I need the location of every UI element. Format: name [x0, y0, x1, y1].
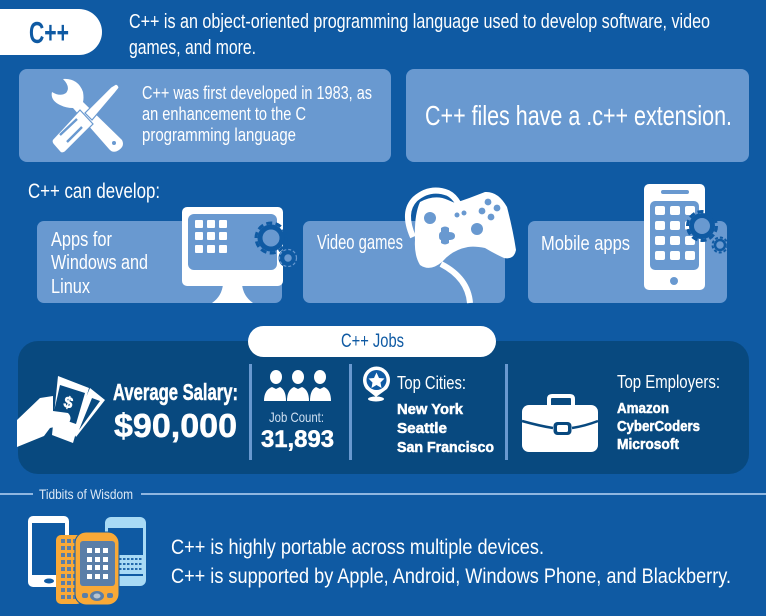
panel text: Linux — [51, 276, 90, 298]
icon: people — [264, 370, 331, 401]
panel: video games — [303, 191, 516, 303]
icon: hand holding money — [17, 376, 105, 447]
panel: mobile apps: Mobile apps — [541, 233, 630, 255]
panel: video games: Video games — [317, 232, 403, 254]
top employers: Top Employers: — [617, 372, 720, 392]
jobs heading pill — [248, 326, 496, 357]
icon: game controller — [408, 191, 516, 303]
icon: briefcase — [522, 396, 598, 452]
salary: $90,000 — [114, 407, 237, 444]
panel text: programming language — [142, 125, 296, 145]
top cities: New York — [397, 402, 464, 418]
salary — [113, 379, 238, 444]
top employers: Microsoft — [617, 437, 679, 453]
panel: mobile apps — [528, 184, 728, 303]
icon: wrench and screwdriver — [52, 79, 123, 153]
icon: hand holding money: $ — [62, 394, 75, 413]
salary: Average Salary: — [113, 379, 238, 405]
top cities: San Francisco — [397, 440, 494, 456]
title pill: C++: C++ — [29, 15, 69, 50]
job count: 31,893 — [261, 426, 334, 453]
top employers: CyberCoders — [617, 419, 700, 435]
heading: can develop: C++ can develop: — [28, 180, 160, 203]
panel: file extension — [406, 69, 749, 162]
top employers: Amazon — [617, 401, 669, 417]
panel: jobs — [17, 326, 749, 474]
panel text: Windows and — [51, 252, 148, 274]
tidbits text: C++ is highly portable across multiple devices. — [171, 536, 544, 559]
top cities: Seattle — [397, 421, 447, 437]
icon: phone with gears — [644, 184, 728, 290]
panel text: an enhancement to the C — [142, 104, 306, 124]
top employers — [617, 372, 720, 453]
title pill: C++ — [0, 9, 102, 55]
top cities — [397, 373, 494, 456]
panel: history — [19, 69, 391, 162]
intro text — [129, 11, 710, 59]
icon: map pin with star — [363, 366, 390, 402]
icon: group of phones — [28, 516, 146, 605]
panel text: C++ was first developed in 1983, as — [142, 83, 372, 103]
job count — [261, 409, 334, 453]
panel text — [142, 83, 372, 145]
jobs heading pill: C++ Jobs — [341, 331, 404, 352]
top cities: Top Cities: — [397, 373, 466, 393]
panel text: Apps for — [51, 229, 112, 251]
tidbits text — [171, 536, 731, 588]
job count: Job Count: — [269, 409, 324, 425]
heading: tidbits of wisdom: Tidbits of Wisdom — [39, 486, 133, 502]
panel: desktop apps — [37, 207, 298, 303]
intro text: games, and more. — [129, 37, 256, 59]
icon: monitor with gears — [182, 207, 298, 303]
panel text — [51, 229, 148, 298]
